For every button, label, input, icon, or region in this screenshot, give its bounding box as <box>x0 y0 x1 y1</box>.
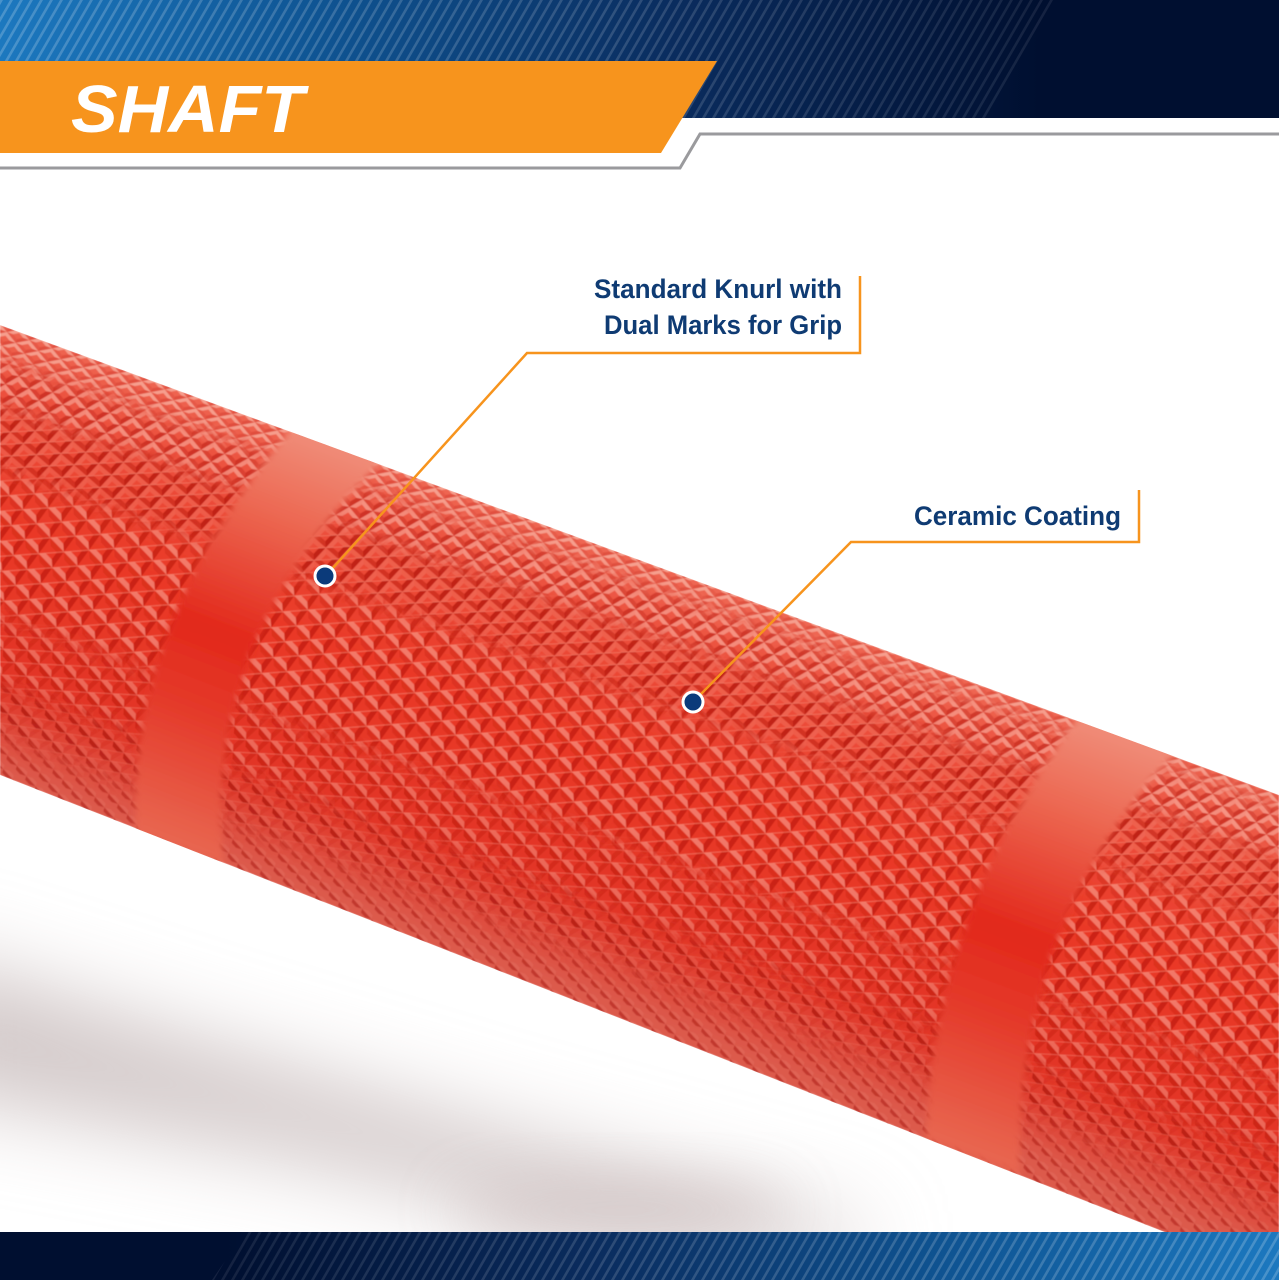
footer band <box>0 1232 1279 1280</box>
header band <box>0 0 1279 118</box>
left smooth band <box>135 425 385 865</box>
barbell shaft <box>0 300 1279 1280</box>
right smooth band <box>926 715 1178 1175</box>
label: ceramic coating: Ceramic Coating <box>914 501 1121 531</box>
knurled surface <box>0 300 1279 1280</box>
marker dot <box>315 566 335 586</box>
callout: ceramic coating <box>683 490 1139 712</box>
title: SHAFT <box>71 72 309 147</box>
title banner <box>0 61 717 153</box>
label: standard knurl: Standard Knurl with <box>594 274 842 304</box>
header divider line <box>0 134 1279 168</box>
label: standard knurl: Dual Marks for Grip <box>604 310 842 340</box>
floor shadow <box>0 950 860 1265</box>
callout: standard knurl <box>315 274 860 586</box>
marker dot <box>683 692 703 712</box>
label: standard knurl <box>594 274 842 340</box>
